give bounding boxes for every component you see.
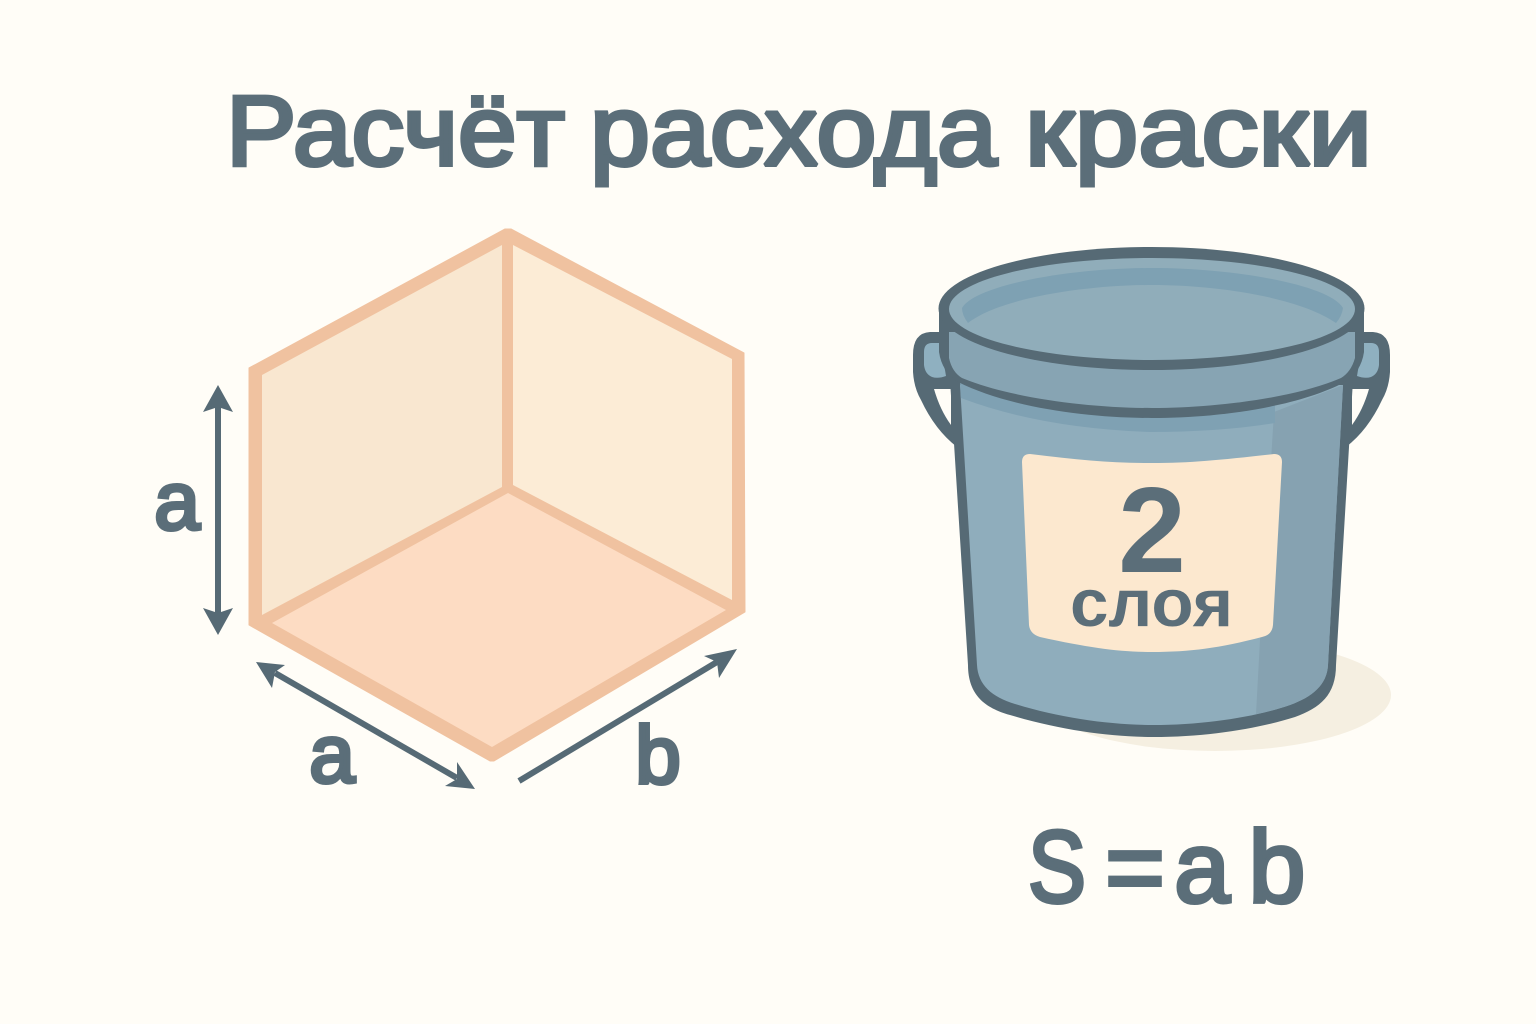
arrow: bottom a xyxy=(256,662,475,789)
formula: b xyxy=(1249,810,1305,924)
lid outline xyxy=(938,247,1364,370)
label: b: b xyxy=(635,710,681,801)
word: слоя: слоя xyxy=(1070,566,1233,641)
title: расхода xyxy=(590,75,998,186)
label: a left: a xyxy=(154,456,200,547)
rim band xyxy=(949,332,1355,408)
body fill xyxy=(960,385,1343,725)
paint bucket xyxy=(913,247,1391,751)
body shade xyxy=(1256,385,1343,714)
formula: = xyxy=(1105,810,1165,924)
arrow: left height a xyxy=(203,385,233,635)
arrow: bottom b xyxy=(519,649,737,781)
rim outline xyxy=(939,308,1364,418)
formula: a xyxy=(1174,812,1230,924)
label: a bottom: a xyxy=(309,709,355,800)
right wall xyxy=(513,245,732,600)
room outline xyxy=(249,229,745,761)
lid top xyxy=(949,258,1355,360)
number 2: 2 xyxy=(1118,462,1186,598)
body outline xyxy=(950,380,1353,737)
left wall xyxy=(262,245,502,615)
floor xyxy=(272,493,726,747)
title xyxy=(226,75,1372,186)
label xyxy=(1022,454,1282,652)
formula xyxy=(1028,810,1305,924)
title: краски xyxy=(1025,75,1372,186)
shadow xyxy=(1039,639,1391,751)
title: Расчёт xyxy=(226,75,565,186)
left handle xyxy=(913,332,958,447)
lid recess xyxy=(962,268,1343,323)
shadow under rim xyxy=(960,382,1275,432)
right handle xyxy=(1345,332,1390,447)
room diagram xyxy=(249,229,745,761)
formula: S xyxy=(1028,810,1086,924)
